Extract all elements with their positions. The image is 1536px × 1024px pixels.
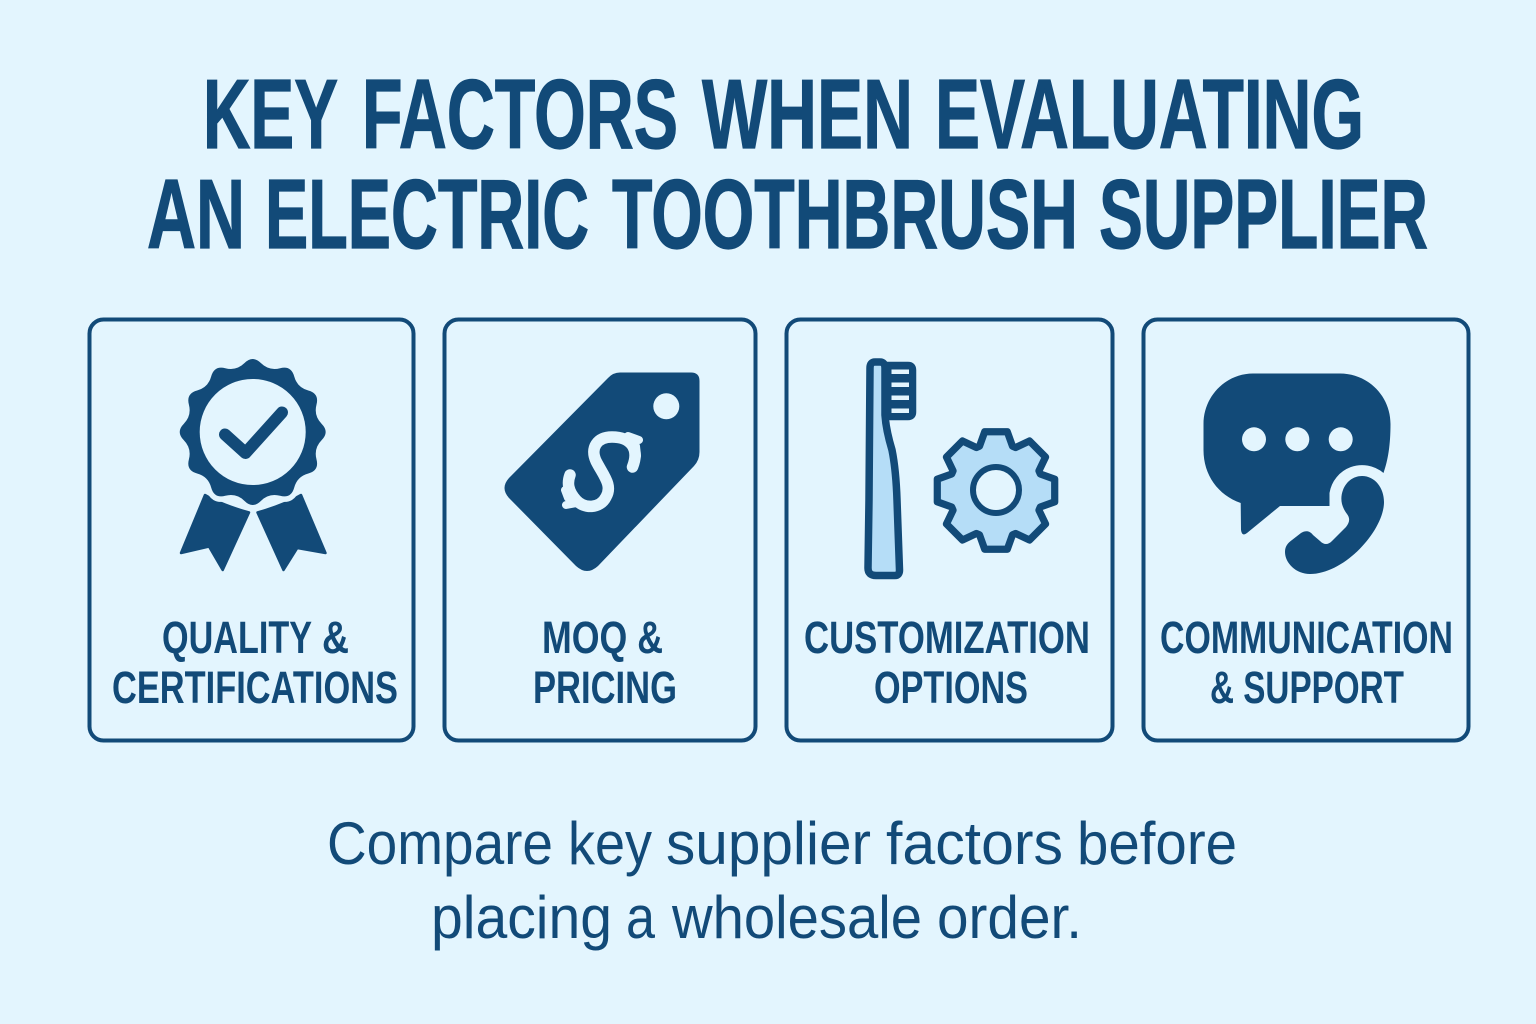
label: MOQ and pricing: PRICING [533, 662, 677, 713]
label: customization options: OPTIONS [874, 662, 1028, 713]
label: quality and certifications [112, 612, 398, 713]
closing text: Compare [327, 810, 553, 877]
label: MOQ and pricing: MOQ & [542, 612, 663, 663]
label: quality and certifications: CERTIFICATIONS [112, 662, 398, 713]
closing text: supplier [666, 810, 871, 877]
title [147, 59, 1428, 269]
title: ELECTRIC [265, 159, 589, 269]
icon: gear [937, 432, 1055, 549]
closing text [327, 810, 1237, 951]
label: customization options [804, 612, 1090, 713]
panel: customization options [786, 320, 1112, 740]
closing text: placing [431, 884, 612, 951]
panel: MOQ and pricing [444, 320, 756, 740]
label: customization options: CUSTOMIZATION [804, 612, 1090, 663]
icon: rosette with checkmark [180, 359, 326, 570]
closing text: wholesale [671, 884, 922, 951]
icon: price tag with dollar sign [504, 372, 700, 571]
title: FACTORS [362, 59, 678, 169]
closing text: factors [886, 810, 1063, 877]
title: KEY [203, 59, 338, 169]
label: communication and support: & SUPPORT [1210, 662, 1404, 713]
panel: quality and certifications [90, 320, 414, 740]
panel: communication and support [1144, 320, 1468, 740]
title: TOOTHBRUSH [612, 159, 1078, 269]
title: AN [147, 159, 245, 269]
label: quality and certifications: & [322, 612, 349, 663]
label: communication and support [1160, 612, 1453, 713]
closing text: a [626, 884, 656, 951]
label: quality and certifications: QUALITY [162, 612, 312, 663]
closing text: key [568, 810, 652, 877]
label: MOQ and pricing [533, 612, 677, 713]
closing text: before [1077, 810, 1237, 877]
closing text: order. [937, 884, 1082, 951]
title: WHEN [702, 59, 913, 169]
icon: speech bubble with phone [1204, 374, 1390, 574]
icon: toothbrush [868, 362, 913, 576]
